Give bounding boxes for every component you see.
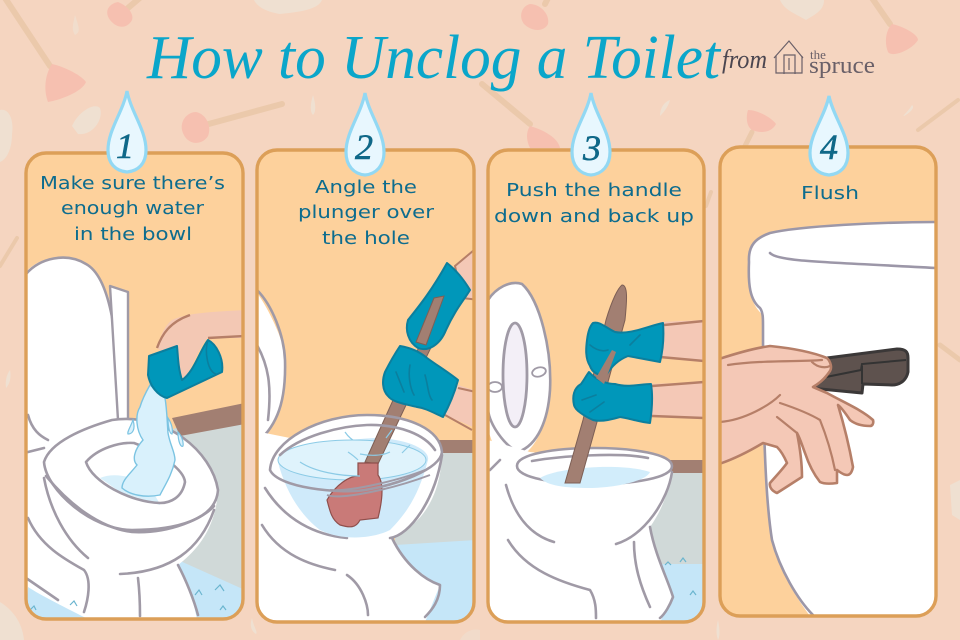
drop 3: 3: [582, 128, 601, 168]
panel 2: angle the plunger: [250, 150, 480, 625]
drop 4: 4: [820, 127, 838, 167]
step 2 text: Angle the: [315, 178, 417, 198]
logo: the spruce: the: [810, 47, 826, 62]
drop 3: [572, 93, 610, 175]
from label: from: [722, 45, 767, 74]
illustration: hand on flush lever: [716, 222, 938, 620]
step 1 text: in the bowl: [74, 225, 192, 245]
drop 2: [346, 93, 384, 175]
step 2 text: the hole: [322, 229, 410, 249]
panel 4: flush: [716, 147, 938, 620]
drop 2: 2: [355, 127, 373, 167]
title: How to Unclog a Toilet: [146, 24, 722, 92]
step 2 text: plunger over: [298, 203, 435, 223]
step 1 text: Make sure there’s: [40, 174, 225, 194]
panel 3: push the handle: [488, 150, 706, 625]
step 1 text: enough water: [61, 199, 205, 219]
step 3 text: Push the handle: [506, 181, 682, 201]
step 3 text: down and back up: [494, 207, 694, 227]
drop 1: [108, 91, 146, 172]
drop 4: [810, 96, 848, 175]
step 4 text: Flush: [801, 184, 859, 204]
illustration: pushing the plunger: [488, 283, 706, 625]
step 3 text: [494, 181, 694, 227]
drop 1: 1: [116, 126, 134, 166]
logo: the spruce: spruce: [809, 53, 875, 79]
step 2 text: [298, 178, 435, 249]
step 1 text: [40, 174, 225, 245]
illustration: toilet and pouring cup: [26, 257, 245, 625]
panel 1: enough water: [26, 153, 245, 625]
illustration: plunger in bowl: [250, 245, 480, 625]
logo: the spruce: [774, 41, 875, 79]
